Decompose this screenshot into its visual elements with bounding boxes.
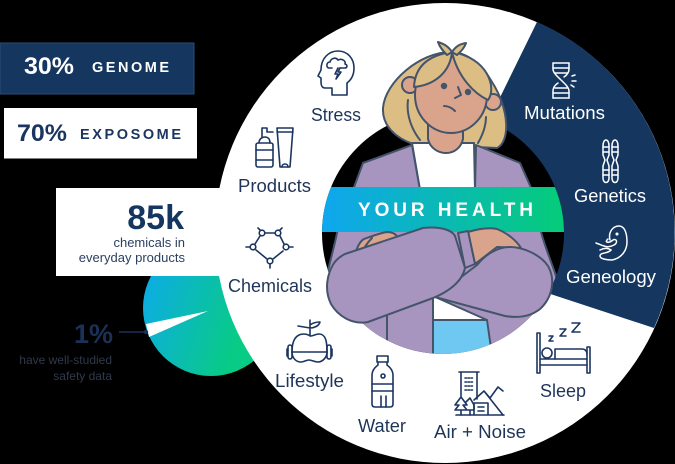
callout: 70% exposome [4,108,197,158]
eyes [441,83,447,89]
nose and mouth [455,87,461,98]
label group: Lifestyle [275,320,344,391]
face [415,57,487,133]
label group: Mutations [524,63,605,123]
callout: 1% well-studied [19,319,148,383]
label group: Geneology: Geneology [566,267,656,287]
label group: Air + Noise: Air + Noise [434,422,526,442]
hand left [352,232,397,266]
panel: genome navy wedge [485,22,675,328]
label group: Sleep: Sleep [540,381,586,401]
icon: mutated DNA [553,63,576,98]
callout: 1% well-studied: safety data [53,369,112,383]
callout: 30% genome: GENOME [92,60,169,76]
label group: Water: Water [358,416,406,436]
label group: Products [238,128,311,196]
illustration: person [326,42,556,362]
icon: chromosome [603,140,618,182]
icon: apple and dumbbell [287,320,332,362]
label group: Stress [311,51,361,125]
label group: Chemicals [228,228,312,296]
ears [402,77,418,93]
neck [428,124,463,153]
shirt [412,143,475,190]
panel: outer white ring [215,3,675,463]
callout: 1% well-studied: have well-studied [19,353,112,367]
left arm [327,227,465,323]
label group: Mutations: Mutations [524,103,605,123]
callout: 30% genome: 30% [24,53,74,80]
callout: 70% exposome: 70% [17,120,67,147]
illustration: crossed arms [327,227,552,323]
label group: Water [358,356,406,436]
callout: 85k chemicals: 85k [127,199,184,237]
callout: 70% exposome: EXPOSOME [80,127,181,143]
label group: Genetics [574,140,646,206]
icon: brain with storm [318,51,354,95]
icon: embryo [596,226,627,260]
icon: molecule [246,228,293,268]
icon: water bottle [372,356,393,407]
panel: inner black circle [322,112,564,354]
callout: 1% well-studied: 1% [74,319,113,349]
hair bangs [414,52,452,87]
label group: Products: Products [238,176,311,196]
icon: city, trees and mountains [455,372,504,415]
torso lower [326,228,556,362]
cuff [458,231,475,268]
label group: Genetics: Genetics [574,186,646,206]
pie slice: 1% wedge [146,311,208,337]
label group: Chemicals: Chemicals [228,276,312,296]
callout: 85k chemicals [56,188,221,276]
label group: Lifestyle: Lifestyle [275,371,344,391]
callout: 85k chemicals: everyday products [79,250,185,265]
callout: 85k chemicals: chemicals in [113,235,185,250]
icon: bottle and tube [256,128,293,167]
label group: Geneology [566,226,656,287]
label group: Stress: Stress [311,105,361,125]
jacket shoulders [353,145,420,190]
label group: Air + Noise [434,372,526,442]
banner: your health [320,187,566,232]
right arm [435,247,552,317]
icon: bed with zzz [537,323,590,373]
banner: your health: YOUR HEALTH [358,200,533,221]
callout: 30% genome [0,43,194,94]
chart: 1% gradient pie [143,240,279,376]
hair back [383,52,506,148]
hand right [468,228,521,264]
label group: Sleep [537,323,590,401]
